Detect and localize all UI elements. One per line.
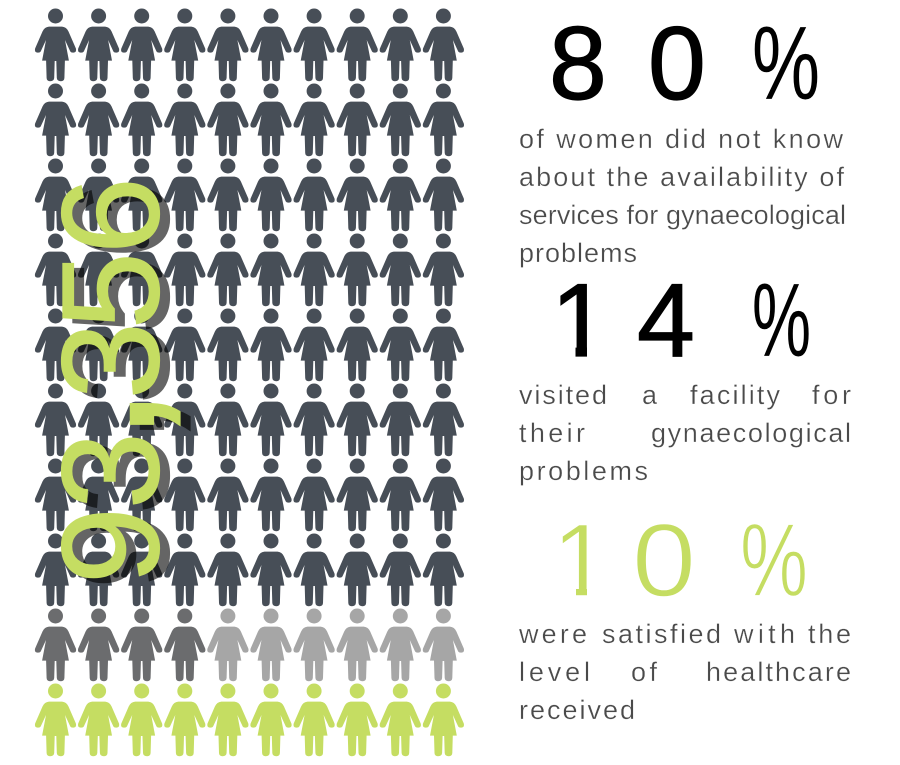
- number text: 5: [34, 252, 188, 329]
- description: 14%: gynaecological: [651, 418, 851, 448]
- description: 14%: facility: [690, 380, 780, 410]
- description: 14%: their: [519, 418, 585, 448]
- figure 80%: %: [752, 6, 820, 122]
- figure 14%: 1: [551, 263, 609, 379]
- light-grey figures: row 9, last 6: [207, 608, 464, 681]
- number text: 3: [34, 322, 188, 399]
- number shadow: [0, 182, 207, 589]
- description: 14%: for: [812, 380, 851, 410]
- description: 10%: level: [519, 657, 590, 687]
- dark figures: rows 1 to 8: [35, 8, 464, 606]
- number shadow: 3: [44, 437, 198, 514]
- vertical number 93,356 with shadow: [0, 177, 207, 589]
- number shadow: 5: [44, 257, 198, 334]
- number shadow: 9: [44, 512, 198, 589]
- description: 14%: a: [642, 380, 658, 410]
- number text: 3: [34, 432, 188, 509]
- stat: 10%: [518, 503, 851, 725]
- description: 14%: problems: [519, 456, 648, 486]
- stat: 80%: [519, 6, 846, 268]
- description: 10%: with: [733, 619, 795, 649]
- description: 10%: of: [631, 657, 657, 687]
- description: 80%: of women did not know: [519, 124, 844, 154]
- figure 80%: 8: [549, 6, 607, 122]
- figure 10%: [552, 503, 808, 619]
- figure 14%: %: [752, 263, 811, 379]
- description: 80%: [519, 124, 846, 268]
- description: 10%: healthcare: [706, 657, 851, 687]
- number text: 6: [34, 177, 188, 254]
- number text: [0, 177, 197, 584]
- pictogram: grid of 100 women: [35, 8, 464, 756]
- number text: 9: [34, 507, 188, 584]
- description: 80%: problems: [519, 238, 637, 268]
- figure 10%: 1: [552, 503, 610, 619]
- description: 10%: received: [519, 695, 635, 725]
- description: 14%: visited: [519, 380, 607, 410]
- stat: 14%: [519, 263, 851, 486]
- figure 10%: 0: [632, 503, 696, 619]
- figure 80%: [549, 6, 820, 122]
- figure 14%: [551, 263, 811, 379]
- description: 14%: [519, 380, 851, 486]
- green figures: row 10: [35, 684, 464, 756]
- figure 14%: 4: [637, 263, 695, 379]
- figure 80%: 0: [648, 6, 706, 122]
- number shadow: 3: [44, 327, 198, 404]
- description: 10%: were: [518, 619, 587, 649]
- number shadow: 6: [44, 182, 198, 259]
- figure 10%: %: [740, 503, 808, 619]
- description: 10%: [518, 619, 851, 725]
- description: 10%: satisfied: [602, 619, 721, 649]
- description: 80%: services for gynaecological: [519, 200, 846, 230]
- description: 10%: the: [808, 619, 851, 649]
- mid-grey figures: row 9, first 4: [35, 608, 205, 681]
- description: 80%: about the availability of: [519, 162, 844, 192]
